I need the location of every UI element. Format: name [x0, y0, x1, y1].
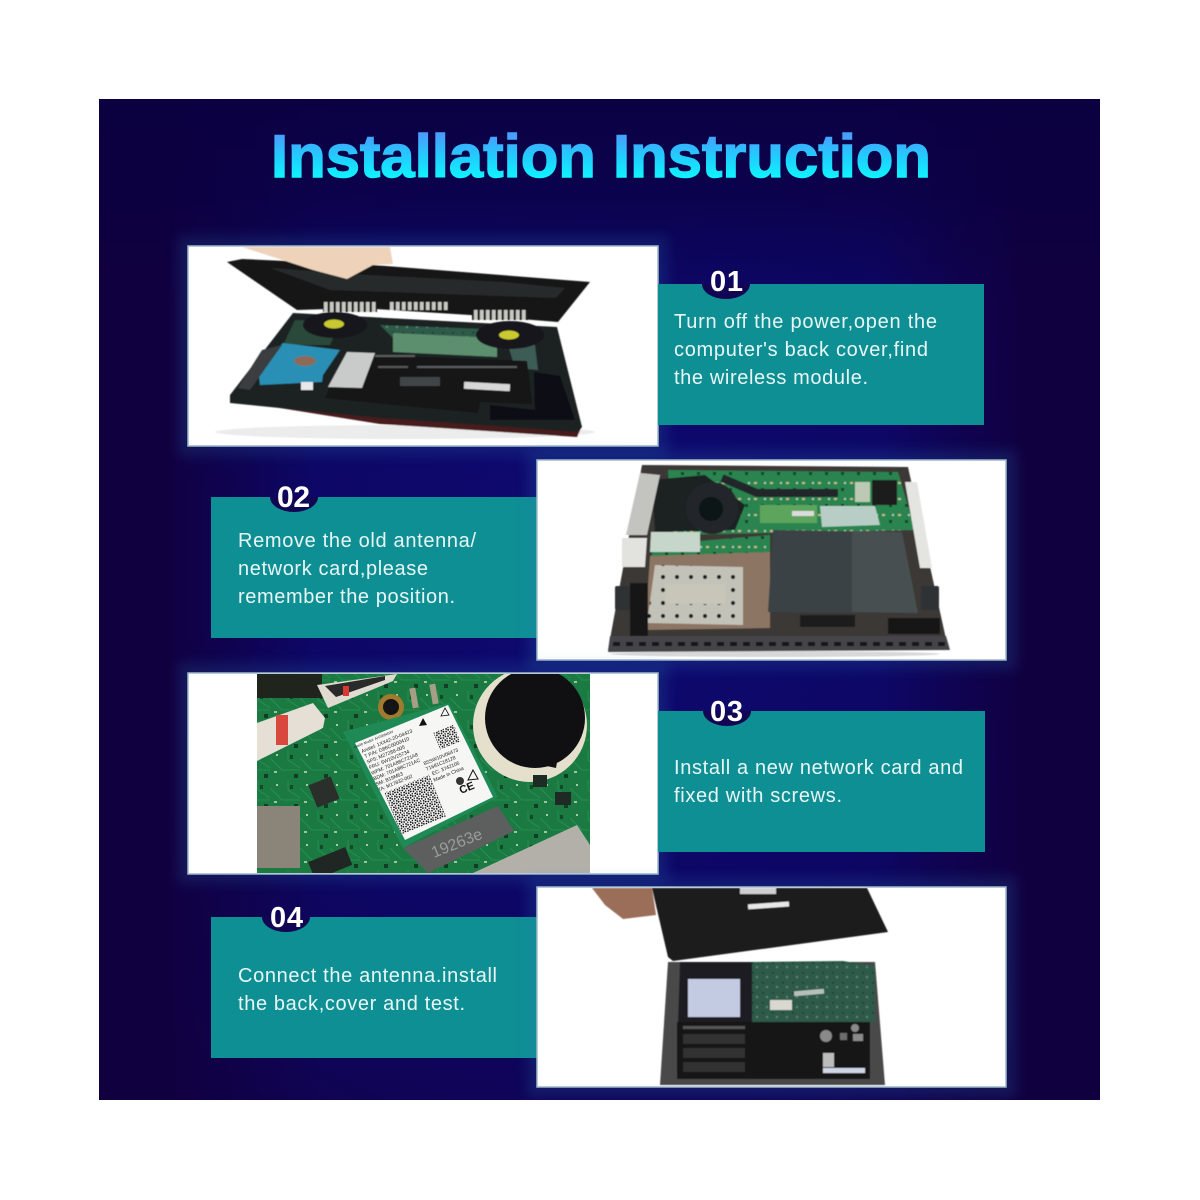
QR codes [433, 725, 461, 749]
back cover [652, 888, 888, 961]
card label text: BDM: 701A88C721AC [373, 758, 422, 782]
title: Installation Instruction [271, 123, 931, 190]
number badge 02: 02 [277, 481, 310, 514]
step 2 text [238, 530, 476, 608]
step 3 photo: new wireless network card fitted [178, 663, 668, 883]
step 2 text: remember the position. [238, 586, 455, 608]
laptop base [660, 962, 885, 1085]
step 1 text [674, 311, 937, 389]
speakers [630, 583, 648, 643]
step 4 text [238, 965, 497, 1015]
wireless card [343, 703, 498, 848]
card label text: SPS: M27288-005 [366, 744, 406, 766]
card label text: Intel® Model: AX200NGW [354, 730, 394, 749]
step 3 text [674, 757, 963, 807]
battery [325, 354, 532, 413]
number badge 04 [262, 902, 310, 934]
step 1 photo: opening the laptop back cover [178, 236, 668, 456]
step 3 text: fixed with screws. [674, 785, 842, 807]
card label text: TA: M17832-002 [377, 774, 414, 793]
heat spreader [473, 825, 590, 873]
number badge 02 [270, 481, 318, 514]
M.2 slot: 19263e [429, 826, 485, 862]
hand [242, 247, 393, 279]
panel: step 2 [211, 481, 537, 638]
card label text: FRU: 5W10V25734 [368, 749, 411, 771]
card label text: SM: B19M63 [375, 771, 404, 788]
step 4 text: the back,cover and test. [238, 993, 465, 1015]
card label text: 8SSW10V06473 [423, 747, 459, 767]
front rail [608, 636, 950, 652]
drive bay [647, 565, 743, 625]
step 1 text: Turn off the power,open the [674, 311, 937, 333]
number badge 04: 04 [270, 902, 303, 934]
chassis [608, 465, 948, 650]
background [99, 99, 1100, 1100]
number badge 03: 03 [710, 696, 743, 728]
number badge 03 [703, 696, 751, 728]
step 1 text: computer's back cover,find [674, 339, 928, 361]
number badge 01: 01 [710, 266, 743, 298]
card label text: WFM: 701A88C721A8 [371, 752, 419, 777]
mounting screw [378, 694, 404, 720]
brackets [626, 473, 660, 535]
M.2 slot [403, 806, 514, 873]
card label text: T1681C18128 [425, 755, 457, 773]
card label text [354, 729, 464, 791]
card label text: EC: 3742106 [431, 760, 461, 777]
laptop base [230, 312, 582, 437]
step 2 text: network card,please [238, 558, 428, 580]
antenna markers and approval marks [419, 708, 478, 797]
laptop lid [227, 259, 590, 322]
hand [592, 888, 656, 919]
panel: step 1 [658, 266, 984, 425]
fan and heat pipe [652, 475, 838, 534]
chips and inductor [257, 806, 300, 868]
antenna markers and approval marks: CE [458, 780, 476, 797]
card label text: Made in China [433, 766, 465, 784]
step 4 photo: refitting the back cover [527, 877, 1017, 1097]
step 3 text: Install a new network card and [674, 757, 963, 779]
step 4 text: Connect the antenna.install [238, 965, 497, 987]
step 2 text: Remove the old antenna/ [238, 530, 476, 552]
panel: step 3 [658, 696, 985, 852]
coin battery [473, 668, 587, 782]
hard disk [258, 343, 340, 385]
number badge 01 [702, 266, 750, 299]
step 2 photo: laptop with back cover removed [527, 450, 1017, 670]
panel: step 4 [211, 902, 537, 1058]
step 1 text: the wireless module. [674, 367, 868, 389]
battery [677, 1022, 870, 1079]
card label text: T P/N: G86C0000410 [364, 736, 411, 760]
card label text: Anatel: 1XX42-20-04423 [360, 728, 414, 755]
connectors [257, 703, 325, 761]
battery [768, 529, 852, 612]
